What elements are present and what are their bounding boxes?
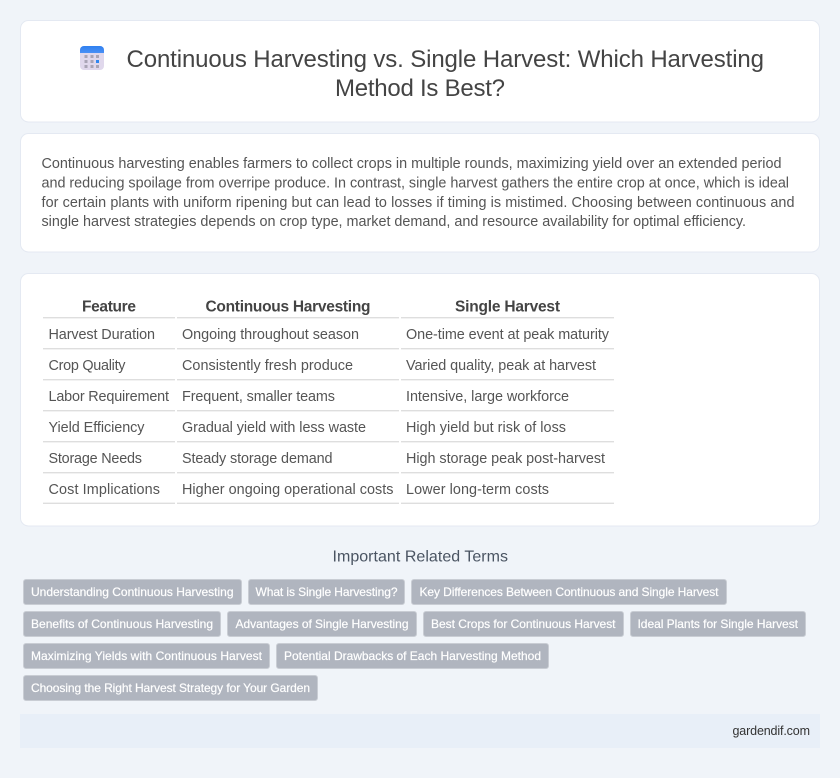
tag: Choosing the Right Harvest Strategy for Your Garden bbox=[31, 681, 310, 695]
intro text bbox=[42, 156, 794, 230]
table row: labor requirement bbox=[48, 389, 569, 405]
title bbox=[126, 46, 764, 102]
table row: yield efficiency bbox=[48, 420, 566, 436]
tag: Key Differences Between Continuous and Single Harvest bbox=[420, 585, 719, 599]
table row: yield efficiency: High yield but risk of loss bbox=[406, 420, 566, 436]
icon: calendar bbox=[80, 46, 104, 70]
tag: Advantages of Single Harvesting bbox=[236, 617, 408, 631]
tag bbox=[228, 612, 416, 636]
tag bbox=[24, 644, 270, 668]
tag: Maximizing Yields with Continuous Harvest bbox=[31, 649, 263, 663]
tag: Best Crops for Continuous Harvest bbox=[431, 617, 616, 631]
intro text: and reducing spoilage from overripe produce. In contrast, single harvest gathers the entire crop at once, which is ideal bbox=[42, 176, 789, 192]
tag bbox=[24, 676, 318, 700]
table row: cost implications: Cost Implications bbox=[48, 482, 160, 498]
intro text: for certain plants with uniform ripening but can lead to losses if timing is mistimed. Choosing between continuous and bbox=[42, 195, 794, 211]
table row: harvest duration bbox=[48, 327, 610, 343]
table row: yield efficiency: Gradual yield with less waste bbox=[182, 420, 366, 436]
table row: cost implications bbox=[48, 482, 549, 498]
tag: Ideal Plants for Single Harvest bbox=[638, 617, 799, 631]
tag: What is Single Harvesting? bbox=[256, 585, 398, 599]
table row: labor requirement: Intensive, large workforce bbox=[406, 389, 569, 405]
table row: harvest duration: One-time event at peak maturity bbox=[406, 327, 610, 343]
table row: crop quality: Consistently fresh produce bbox=[182, 358, 353, 374]
table row: cost implications: Higher ongoing operational costs bbox=[182, 482, 394, 498]
table row: storage needs: Storage Needs bbox=[48, 451, 142, 467]
intro text: Continuous harvesting enables farmers to collect crops in multiple rounds, maximizing yield over an extended period bbox=[42, 156, 782, 172]
table row: crop quality: Crop Quality bbox=[48, 358, 126, 374]
table row: yield efficiency: Yield Efficiency bbox=[48, 420, 145, 436]
intro text: single harvest strategies depends on crop type, market demand, and resource availability for optimal efficiency. bbox=[42, 214, 746, 230]
title: Continuous Harvesting vs. Single Harvest: Which Harvesting bbox=[126, 46, 764, 73]
table row: harvest duration: Ongoing throughout season bbox=[182, 327, 359, 343]
table row: storage needs: High storage peak post-harvest bbox=[406, 451, 605, 467]
table row: labor requirement: Labor Requirement bbox=[48, 389, 169, 405]
tag bbox=[276, 644, 548, 668]
panel: intro paragraph bbox=[20, 134, 820, 252]
tag bbox=[248, 580, 404, 604]
tag bbox=[424, 612, 624, 636]
table row: crop quality bbox=[48, 358, 596, 374]
table header row bbox=[82, 298, 560, 316]
tag bbox=[630, 612, 806, 636]
table row: labor requirement: Frequent, smaller teams bbox=[182, 389, 335, 405]
tag bbox=[24, 580, 242, 604]
footer site name: gardendif.com bbox=[732, 724, 810, 738]
title: Method Is Best? bbox=[335, 75, 505, 102]
tag: Benefits of Continuous Harvesting bbox=[31, 617, 213, 631]
panel: comparison table bbox=[20, 274, 820, 526]
table row: storage needs: Steady storage demand bbox=[182, 451, 332, 467]
related terms tags bbox=[24, 580, 806, 700]
table row: storage needs bbox=[48, 451, 605, 467]
table row: harvest duration: Harvest Duration bbox=[48, 327, 155, 343]
tag: Understanding Continuous Harvesting bbox=[31, 585, 234, 599]
tag bbox=[412, 580, 726, 604]
heading: important related terms: Important Related Terms bbox=[332, 549, 508, 566]
table row: crop quality: Varied quality, peak at harvest bbox=[406, 358, 596, 374]
tag: Potential Drawbacks of Each Harvesting Method bbox=[284, 649, 541, 663]
table row: cost implications: Lower long-term costs bbox=[406, 482, 549, 498]
panel: title card bbox=[20, 20, 820, 122]
table header row: Single Harvest bbox=[455, 298, 560, 316]
footer bar bbox=[20, 714, 820, 748]
table header row: Continuous Harvesting bbox=[206, 298, 370, 316]
tag bbox=[24, 612, 220, 636]
table header row: Feature bbox=[82, 298, 136, 316]
